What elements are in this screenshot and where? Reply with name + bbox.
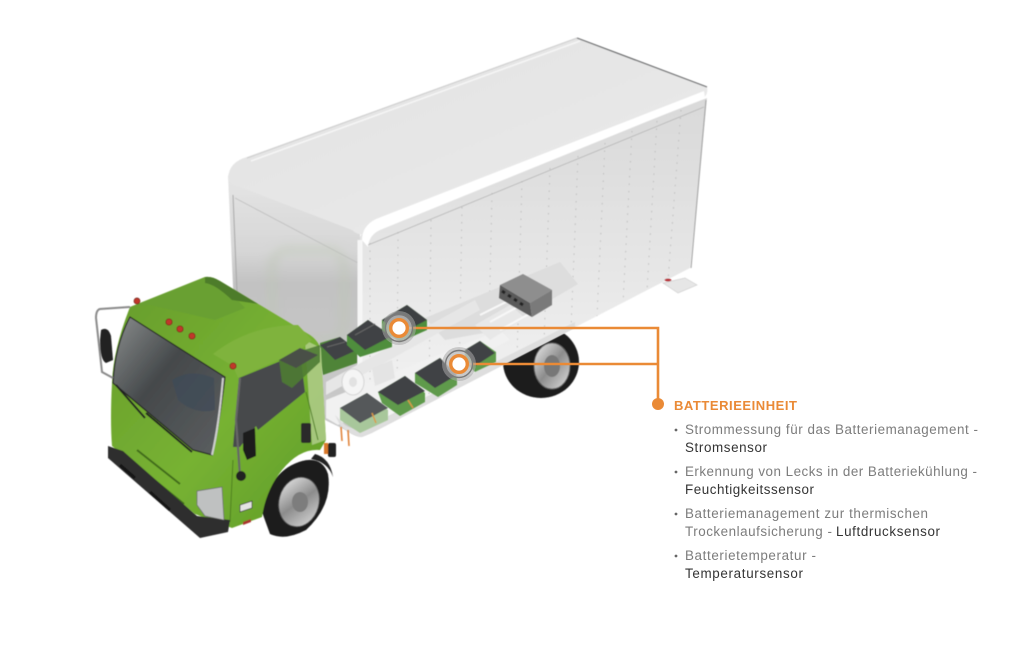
side mirror bbox=[236, 378, 256, 481]
leader lines bbox=[399, 328, 658, 404]
roof marker lights bbox=[134, 298, 236, 369]
box roof bbox=[228, 38, 707, 235]
sensor list bbox=[675, 422, 978, 581]
item: Luftdrucksensor: Luftdrucksensor bbox=[836, 524, 941, 539]
ghost of cab through box bbox=[272, 250, 344, 340]
mirror arm and mirror bbox=[96, 307, 130, 378]
red marker bbox=[664, 278, 672, 282]
cab rear translucent bbox=[305, 340, 326, 445]
sensor marker 2 bbox=[442, 347, 476, 381]
wipers bbox=[116, 385, 192, 452]
battery lower 1 bbox=[340, 393, 388, 433]
cargo box bbox=[228, 38, 707, 437]
front wheel bbox=[262, 460, 329, 537]
item: Luftdrucksensor bbox=[675, 506, 941, 539]
door handle bbox=[301, 423, 311, 443]
item: Feuchtigkeitssensor bbox=[675, 464, 977, 497]
heading: Batterieeinheit: BATTERIEEINHEIT bbox=[674, 398, 797, 413]
leader end dot bbox=[652, 398, 664, 410]
battery upper 3 bbox=[382, 305, 427, 342]
door frame line bbox=[230, 392, 318, 522]
item: Feuchtigkeitssensor: Erkennung von Lecks in der Batteriekühlung - bbox=[685, 464, 977, 479]
item: Feuchtigkeitssensor: Feuchtigkeitssensor bbox=[685, 482, 815, 497]
chassis frame bbox=[326, 262, 578, 437]
truck cab bbox=[96, 277, 336, 538]
battery upper 2 bbox=[347, 320, 392, 357]
side window bbox=[233, 353, 305, 447]
item: Temperatursensor: Batterietemperatur - bbox=[685, 548, 816, 563]
item: Luftdrucksensor: Trockenlaufsicherung - bbox=[685, 524, 832, 539]
item: Stromsensor: Stromsensor bbox=[685, 440, 768, 455]
roof shading bbox=[130, 277, 245, 320]
battery packs bbox=[320, 305, 496, 446]
mud flap bbox=[311, 454, 333, 477]
item: Luftdrucksensor: Batteriemanagement zur thermischen bbox=[685, 506, 928, 521]
battery lower 2 bbox=[378, 376, 425, 416]
battery upper 1 bbox=[320, 337, 357, 375]
cab body bbox=[111, 277, 326, 528]
battery lower 4 bbox=[465, 341, 496, 372]
turn signal bbox=[324, 443, 336, 457]
item: Temperatursensor: Temperatursensor bbox=[685, 566, 804, 581]
rear step pad bbox=[663, 278, 697, 293]
box side face bbox=[360, 98, 707, 437]
bumper bbox=[108, 446, 230, 538]
windshield bbox=[113, 317, 225, 455]
sensor marker 1 bbox=[382, 311, 416, 345]
box front face bbox=[228, 172, 360, 437]
item: Stromsensor: Strommessung für das Batteriemanagement - bbox=[685, 422, 978, 437]
orange battery pins bbox=[341, 427, 349, 446]
inverter box bbox=[499, 274, 552, 317]
item: Stromsensor bbox=[675, 422, 978, 455]
front grille bbox=[137, 450, 184, 504]
icon: rear wheel bbox=[503, 326, 579, 398]
fog light bbox=[240, 501, 252, 512]
roof edge highlight bbox=[362, 91, 705, 247]
battery lower 3 bbox=[415, 358, 457, 397]
red step marker bbox=[243, 519, 251, 525]
headlight bbox=[197, 487, 224, 520]
item: Temperatursensor bbox=[675, 548, 816, 581]
side panel seams bbox=[370, 110, 681, 432]
